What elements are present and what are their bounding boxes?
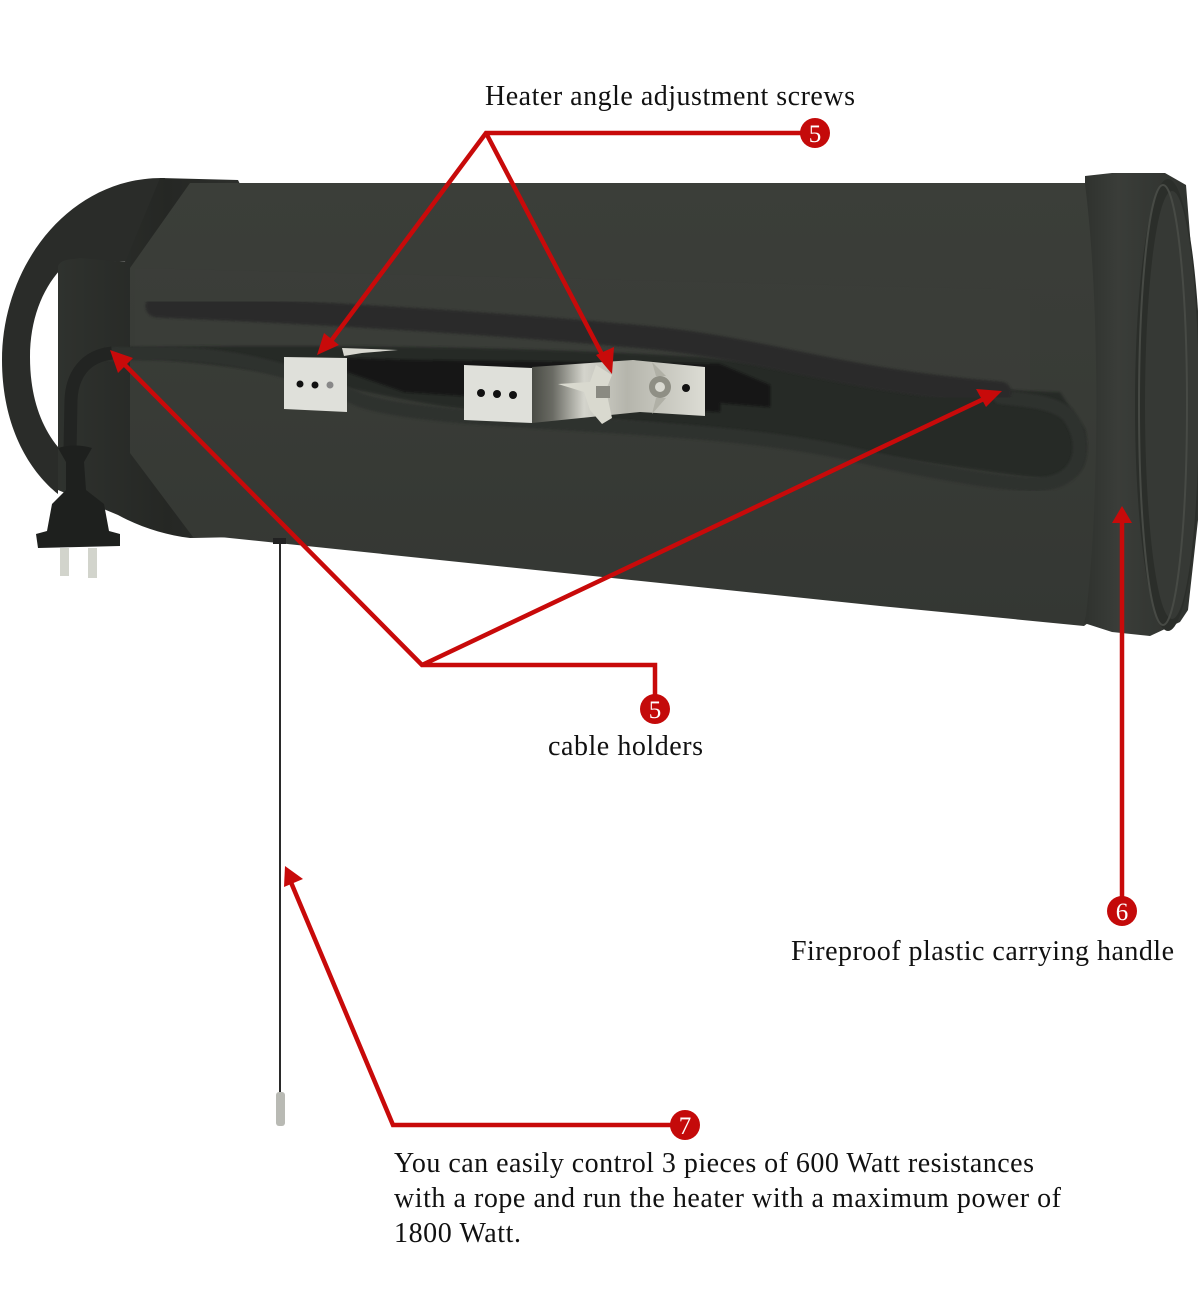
callout: cable holders <box>110 350 1002 762</box>
callout: cable holders: 5 <box>649 697 661 724</box>
description text: 1800 Watt. <box>394 1218 521 1249</box>
upper body crease <box>135 268 1030 395</box>
pull rope <box>279 542 281 1092</box>
right end cap <box>1084 173 1198 636</box>
rope weight <box>276 1092 285 1126</box>
leader line <box>290 880 685 1125</box>
label: cable holders <box>548 731 703 762</box>
power cord <box>70 353 112 452</box>
middle metal bracket <box>464 365 532 423</box>
callout: rope control <box>284 866 1062 1249</box>
dark slot behind brackets <box>347 358 770 412</box>
left end cap <box>58 178 240 538</box>
arrowheads <box>317 333 614 374</box>
main body <box>130 183 1105 626</box>
number badge 6 <box>1107 896 1137 926</box>
leader lines <box>325 133 815 362</box>
left metal bracket <box>284 357 347 412</box>
number badge 5 <box>640 694 670 724</box>
metal plate with wing nuts <box>532 360 705 423</box>
arrowhead <box>1112 506 1132 523</box>
callout: heater angle adjustment screws: 5 <box>809 121 821 148</box>
callout: carrying handle: 6 <box>1116 899 1128 926</box>
label: Fireproof plastic carrying handle <box>791 936 1174 967</box>
description text <box>394 1148 1062 1249</box>
rope top clip <box>273 538 286 544</box>
plug <box>36 446 120 548</box>
upper cable <box>157 306 1000 393</box>
carrying arc at left end <box>2 178 165 494</box>
arrowhead <box>284 866 303 887</box>
callout: rope control: 7 <box>679 1113 691 1140</box>
description text: with a rope and run the heater with a maximum power of <box>394 1183 1062 1214</box>
label: Heater angle adjustment screws <box>485 81 855 112</box>
leader lines <box>118 358 990 709</box>
callout: heater angle adjustment screws <box>317 81 855 374</box>
number badge 7 <box>670 1110 700 1140</box>
heater product <box>2 170 1200 1126</box>
arrowheads <box>110 350 1002 407</box>
end cap inner disc <box>1135 179 1200 631</box>
callout: carrying handle <box>791 506 1174 967</box>
number badge 5 <box>800 118 830 148</box>
lower cable sweep <box>110 353 1080 484</box>
description text: You can easily control 3 pieces of 600 Watt resistances <box>394 1148 1034 1179</box>
shade band under upper cable <box>130 346 1087 481</box>
leader line <box>1120 518 1124 911</box>
plug pins <box>60 548 69 576</box>
